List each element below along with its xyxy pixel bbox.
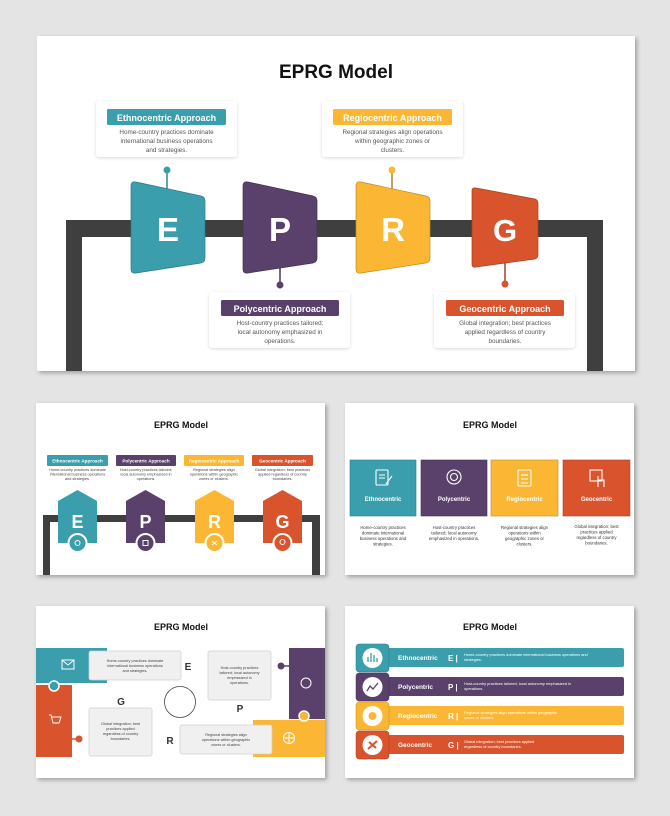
panel: slide 5 bars: R | bbox=[448, 712, 458, 721]
callout: regiocentric: clusters. bbox=[381, 147, 404, 154]
panel: slide 4 puzzle: Host-country practices bbox=[221, 666, 258, 670]
callout: regiocentric bbox=[322, 101, 463, 157]
panel: slide 5 bars: E | bbox=[448, 654, 458, 663]
shape: E: E bbox=[157, 211, 179, 248]
shape: P: P bbox=[269, 211, 291, 248]
panel: slide 3 squares: geographic zones or bbox=[505, 536, 545, 541]
labels row bbox=[47, 455, 313, 481]
panel: slide 3 squares: EPRG Model bbox=[463, 420, 517, 430]
callout: polycentric: operations. bbox=[264, 338, 296, 345]
panel: slide 3 squares: Host-country practices bbox=[433, 525, 475, 530]
panel: slide 4 puzzle: R bbox=[166, 736, 174, 747]
panel: slide 3 squares: emphasized in operations. bbox=[429, 536, 479, 541]
labels row: operations within geographic bbox=[190, 472, 238, 476]
panel: slide 4 puzzle: E bbox=[185, 662, 192, 673]
panel: slide 3 squares: Regiocentric bbox=[506, 497, 543, 503]
panel: slide 3 squares: tailored; local autonomy bbox=[431, 530, 478, 536]
shape: R bbox=[356, 182, 430, 273]
labels row: local autonomy emphasized in bbox=[120, 472, 172, 476]
callout: polycentric: Host-country practices tailored; bbox=[237, 320, 324, 327]
panel: slide 4 puzzle bbox=[36, 606, 325, 778]
panel: slide 3 squares: Geocentric bbox=[581, 497, 613, 503]
callout: geocentric bbox=[434, 292, 575, 348]
panel: slide 3 squares: clusters. bbox=[516, 542, 532, 546]
panel: slide 5 bars: Global integration; best practices applied bbox=[464, 739, 534, 744]
panel: slide 4 puzzle: boundaries. bbox=[111, 737, 130, 741]
labels row: Ethnocentric Approach bbox=[52, 458, 103, 464]
panel: slide 4 puzzle: Home-country practices dominate bbox=[107, 659, 163, 663]
panel: slide 5 bars: regardless of country boundaries. bbox=[464, 744, 522, 749]
labels row: boundaries. bbox=[273, 477, 292, 481]
panel: slide 3 squares: business operations and bbox=[360, 536, 407, 541]
labels row: Host-country practices tailored; bbox=[120, 468, 172, 472]
panel: slide 4 puzzle: EPRG Model bbox=[154, 622, 208, 632]
callout: ethnocentric: and strategies. bbox=[146, 147, 187, 154]
shape: R: R bbox=[381, 211, 405, 248]
panel: main slide bbox=[37, 36, 635, 371]
panel: slide 4 puzzle: tailored; local autonomy bbox=[219, 671, 260, 675]
callout: polycentric: Polycentric Approach bbox=[234, 304, 326, 314]
panel: slide 3 squares: Ethnocentric bbox=[365, 497, 402, 503]
panel: slide 3 squares: boundaries. bbox=[585, 540, 608, 546]
panel: slide 5 bars: Host-country practices tailored; local autonomy emphasized in bbox=[464, 681, 571, 686]
panel: slide 3 squares: Regional strategies align bbox=[501, 525, 549, 530]
panel: slide 5 bars: P | bbox=[448, 683, 458, 692]
panel: slide 3 squares bbox=[345, 403, 634, 575]
panel: slide 4 puzzle: zones or clusters. bbox=[211, 743, 241, 747]
panel: slide 5 bars: Geocentric bbox=[398, 742, 432, 749]
labels row: operations. bbox=[137, 477, 155, 481]
callout: geocentric: Geocentric Approach bbox=[459, 304, 551, 314]
panel: slide 4 puzzle: operations within geographic bbox=[202, 738, 250, 742]
panel: slide 2 pentagons: EPRG Model bbox=[154, 420, 208, 430]
panel: slide 5 bars: Regiocentric bbox=[398, 713, 438, 720]
labels row: international business operations bbox=[50, 472, 105, 476]
title: EPRG Model bbox=[279, 62, 393, 83]
panel: slide 4 puzzle: emphasized in bbox=[227, 676, 252, 680]
panel: slide 3 squares: dominate international bbox=[362, 530, 404, 536]
callout: regiocentric: Regional strategies align operations bbox=[342, 129, 443, 136]
callout: ethnocentric bbox=[96, 101, 237, 157]
panel: slide 4 puzzle: Regional strategies align bbox=[205, 733, 247, 737]
panel: slide 4 puzzle: G bbox=[117, 697, 125, 708]
labels row: Global integration; best practices bbox=[255, 468, 310, 472]
callout: geocentric: boundaries. bbox=[489, 338, 522, 345]
icons bbox=[376, 470, 604, 487]
panel: slide 4 puzzle: and strategies. bbox=[123, 669, 147, 673]
panel: slide 4 puzzle: operations. bbox=[230, 681, 249, 685]
labels row: applied regardless of country bbox=[258, 472, 307, 476]
shape: E bbox=[131, 182, 205, 273]
panel: slide 3 squares: regardless of country bbox=[576, 535, 617, 540]
callout: ethnocentric: international business operations bbox=[120, 138, 213, 145]
panel: slide 5 bars: EPRG Model bbox=[463, 622, 517, 632]
frame bbox=[66, 220, 603, 371]
callout: polycentric bbox=[209, 292, 350, 348]
panel: slide 5 bars: Polycentric bbox=[398, 684, 433, 691]
panel: slide 3 squares: strategies. bbox=[373, 542, 393, 546]
panel: slide 3 squares: Global integration; best bbox=[574, 524, 619, 529]
callout: regiocentric: within geographic zones or bbox=[354, 138, 430, 145]
pentagons: G bbox=[275, 512, 290, 532]
labels row: Geocentric Approach bbox=[259, 458, 306, 464]
callout: geocentric: Global integration; best practices bbox=[459, 320, 551, 327]
panel: slide 5 bars: Ethnocentric bbox=[398, 655, 438, 662]
panel: slide 3 squares: Polycentric bbox=[438, 497, 471, 503]
panel: slide 5 bars: G | bbox=[448, 741, 459, 750]
shape: P bbox=[243, 182, 317, 273]
labels row: and strategies. bbox=[65, 477, 90, 481]
panel: slide 4 puzzle: regardless of country bbox=[103, 732, 138, 736]
panel: slide 4 puzzle: Global integration; best bbox=[101, 722, 141, 726]
panel: slide 5 bars: Regional strategies align operations within geographic bbox=[464, 710, 557, 715]
pentagons: P bbox=[139, 512, 152, 532]
pentagons: R bbox=[208, 512, 221, 532]
panel: slide 5 bars: operations. bbox=[464, 686, 483, 691]
shape: G: G bbox=[493, 213, 517, 248]
labels row: Home-country practices dominate bbox=[49, 468, 106, 472]
panel: slide 5 bars: zones or clusters. bbox=[464, 715, 494, 720]
pentagons bbox=[58, 490, 302, 552]
callout: ethnocentric: Ethnocentric Approach bbox=[117, 113, 216, 123]
panel: slide 5 bars: Home-country practices dominate international business operations and bbox=[464, 652, 588, 657]
pentagons: E bbox=[71, 512, 84, 532]
panel: slide 3 squares: Home-country practices bbox=[360, 525, 406, 530]
labels row: zones or clusters. bbox=[199, 477, 229, 481]
panel: slide 2 pentagons bbox=[36, 403, 325, 575]
callout: regiocentric: Regiocentric Approach bbox=[343, 113, 442, 123]
panel: slide 4 puzzle: practices applied bbox=[106, 727, 135, 731]
labels row: Regional strategies align bbox=[193, 468, 235, 472]
callout: ethnocentric: Home-country practices dominate bbox=[119, 129, 214, 136]
panel: slide 3 squares: practices applied bbox=[580, 530, 613, 534]
panel: slide 5 bars: strategies. bbox=[464, 657, 482, 662]
callout: polycentric: local autonomy emphasized in bbox=[238, 329, 323, 336]
panel: slide 5 bars bbox=[345, 606, 634, 778]
pins bbox=[164, 166, 508, 288]
labels row: Polycentric Approach bbox=[122, 458, 170, 464]
panel: slide 4 puzzle: international business operations bbox=[107, 664, 163, 668]
shape: G bbox=[472, 188, 538, 267]
panel: slide 3 squares: operations within bbox=[508, 530, 541, 536]
panel: slide 4 puzzle: P bbox=[237, 704, 244, 715]
labels row: Regiocentric Approach bbox=[189, 458, 239, 464]
callout: geocentric: applied regardless of country bbox=[465, 329, 546, 336]
